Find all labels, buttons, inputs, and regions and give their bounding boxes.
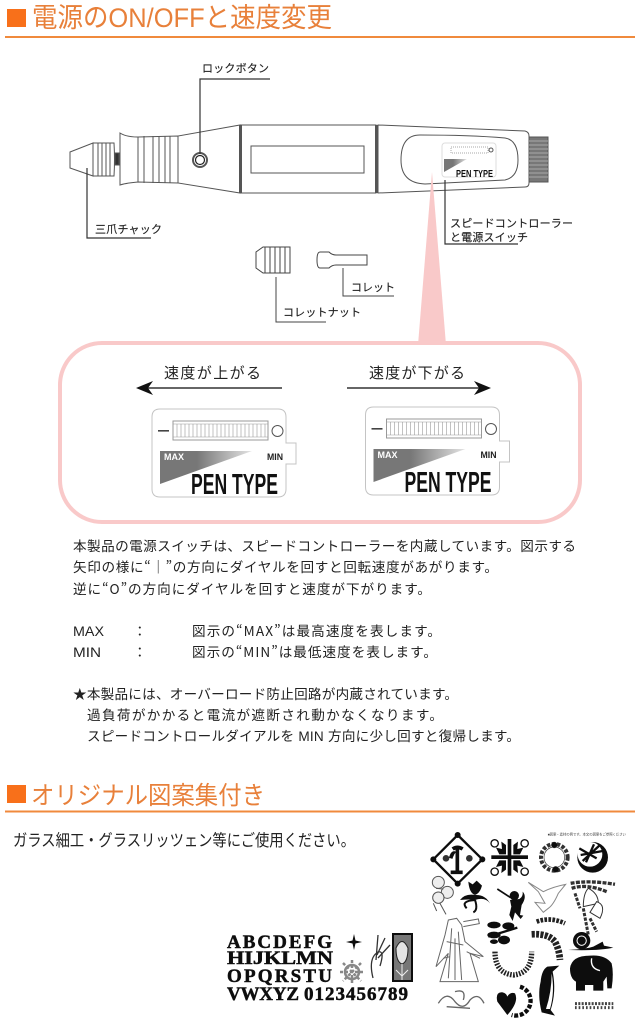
- leaf ornament: [371, 935, 390, 978]
- label: three jaw chuck: [87, 168, 162, 238]
- crescent emblem: [577, 842, 608, 873]
- speed down label: 速度が下がる: [369, 365, 465, 382]
- flower line drawing: [432, 876, 453, 914]
- small floral spray: [537, 920, 565, 923]
- arrow: speed down, right: [347, 381, 491, 395]
- text block: MAX and MIN definitions: MIN: [73, 645, 101, 660]
- switch plate: speed down: MAX: [378, 450, 398, 460]
- heading: original pattern collection: オリジナル図案集付き: [31, 782, 265, 810]
- robed figure outline: [436, 918, 483, 982]
- snowflake ornament: [340, 960, 364, 984]
- black branch: [487, 922, 517, 944]
- heart and leaves: [497, 987, 531, 1016]
- diagram: rotary tool: [70, 125, 548, 193]
- sample: blackletter alphabet: ABCDEFG: [227, 932, 332, 953]
- black tulip: [460, 881, 490, 912]
- label: collet: コレット: [351, 282, 395, 294]
- sample: blackletter alphabet: VWXYZ: [227, 984, 299, 1005]
- dove outline: [528, 882, 566, 912]
- cherub silhouette: [497, 889, 525, 921]
- sample: blackletter alphabet: 0123456789: [304, 984, 408, 1005]
- sample: pattern collection: [430, 832, 627, 1016]
- label: speed controller and power switch: と電源スイッチ: [450, 230, 528, 244]
- heading: original pattern collection: [5, 782, 635, 812]
- collet part: [317, 252, 367, 268]
- swirl ornament: [438, 991, 484, 1008]
- sample: blackletter alphabet: HIJKLMN: [227, 948, 333, 969]
- tulip panel: [393, 934, 412, 981]
- label: speed controller and power switch: スピードコントローラー: [450, 217, 573, 230]
- sample: small ornaments: [340, 934, 412, 984]
- laurel wreath: [495, 952, 532, 975]
- text block: MAX and MIN definitions: MAX: [73, 624, 104, 639]
- switch plate: speed up: [152, 409, 296, 501]
- switch plate: speed down: MIN: [480, 450, 496, 460]
- grip: [120, 125, 240, 193]
- label: collet: [343, 268, 395, 296]
- text block: overload protection note: [73, 687, 520, 744]
- snail: [568, 932, 613, 950]
- text block: MAX and MIN definitions: 図示の“MIN”は最低速度を表します。: [192, 641, 437, 661]
- text block: switch explanation: 逆に“O”の方向にダイヤルを回すと速度が下がります。: [73, 578, 431, 598]
- text block: switch explanation: 矢印の様に“｜”の方向にダイヤルを回すと回転速度があがります。: [73, 556, 498, 576]
- caption: ■図案・素材の例です。本文の図案をご参照ください: [548, 832, 627, 837]
- text block: overload protection note: 過負荷がかかると電流が遮断され動かなくなります。: [87, 708, 443, 723]
- panel: speed direction: [60, 343, 580, 522]
- label: speed controller and power switch: [445, 180, 573, 244]
- elephant: [570, 955, 613, 991]
- text block: overload protection note: スピードコントロールダイアルを MIN 方向に少し回すと復帰します。: [87, 728, 520, 744]
- arrow: speed up, left: [136, 381, 282, 395]
- speed controller section: PEN TYPE: [456, 169, 493, 180]
- small flower row: [575, 1004, 613, 1008]
- switch plate: speed up: PEN TYPE: [191, 469, 278, 501]
- label: three jaw chuck: 三爪チャック: [95, 223, 162, 236]
- sample: blackletter alphabet: OPQRSTU: [227, 966, 332, 987]
- diamond monogram: [430, 832, 485, 887]
- penguin: [539, 966, 559, 1016]
- text block: MAX and MIN definitions: ：: [133, 645, 147, 660]
- label: collet nut: [276, 277, 361, 322]
- heading: power on/off and speed change: [5, 3, 635, 38]
- corner floral: [532, 934, 560, 960]
- text block: MAX and MIN definitions: 図示の“MAX”は最高速度を表します。: [192, 620, 441, 640]
- black cross ornament: [491, 839, 528, 876]
- text block: MAX and MIN definitions: ：: [133, 624, 147, 639]
- label: lock button: [200, 62, 270, 154]
- switch plate: speed down: [366, 407, 510, 499]
- text block: switch explanation: 本製品の電源スイッチは、スピードコントローラーを内蔵しています。図示する: [73, 539, 576, 554]
- collet nut part: [256, 247, 290, 273]
- adjustment knob: [529, 137, 548, 182]
- sample: blackletter alphabet: [227, 932, 408, 1005]
- label: lock button: ロックボタン: [202, 62, 269, 75]
- speed up label: 速度が上がる: [164, 365, 261, 382]
- label: collet nut: コレットナット: [283, 306, 361, 319]
- switch plate: speed down: PEN TYPE: [404, 467, 492, 499]
- speed controller section: [378, 125, 529, 193]
- text block: overload protection note: ★本製品には、オーバーロード防止回路が内蔵されています。: [73, 687, 458, 702]
- switch plate: speed up: MIN: [267, 452, 283, 462]
- floral wreath: [541, 842, 568, 872]
- lock button: [193, 153, 207, 167]
- pink callout wedge: [418, 172, 446, 345]
- switch plate: speed up: MAX: [164, 452, 184, 462]
- text block: switch explanation: [73, 539, 576, 598]
- heading: power on/off and speed change: 電源のON/OFFと速度変更: [32, 3, 332, 33]
- text block: MAX and MIN definitions: [73, 620, 441, 661]
- bells and holly: [571, 882, 615, 935]
- main body: [239, 125, 378, 193]
- star ornament: [346, 934, 362, 950]
- text: usage note: ガラス細工・グラスリッツェン等にご使用ください。: [13, 831, 355, 850]
- chuck nose: [70, 143, 119, 176]
